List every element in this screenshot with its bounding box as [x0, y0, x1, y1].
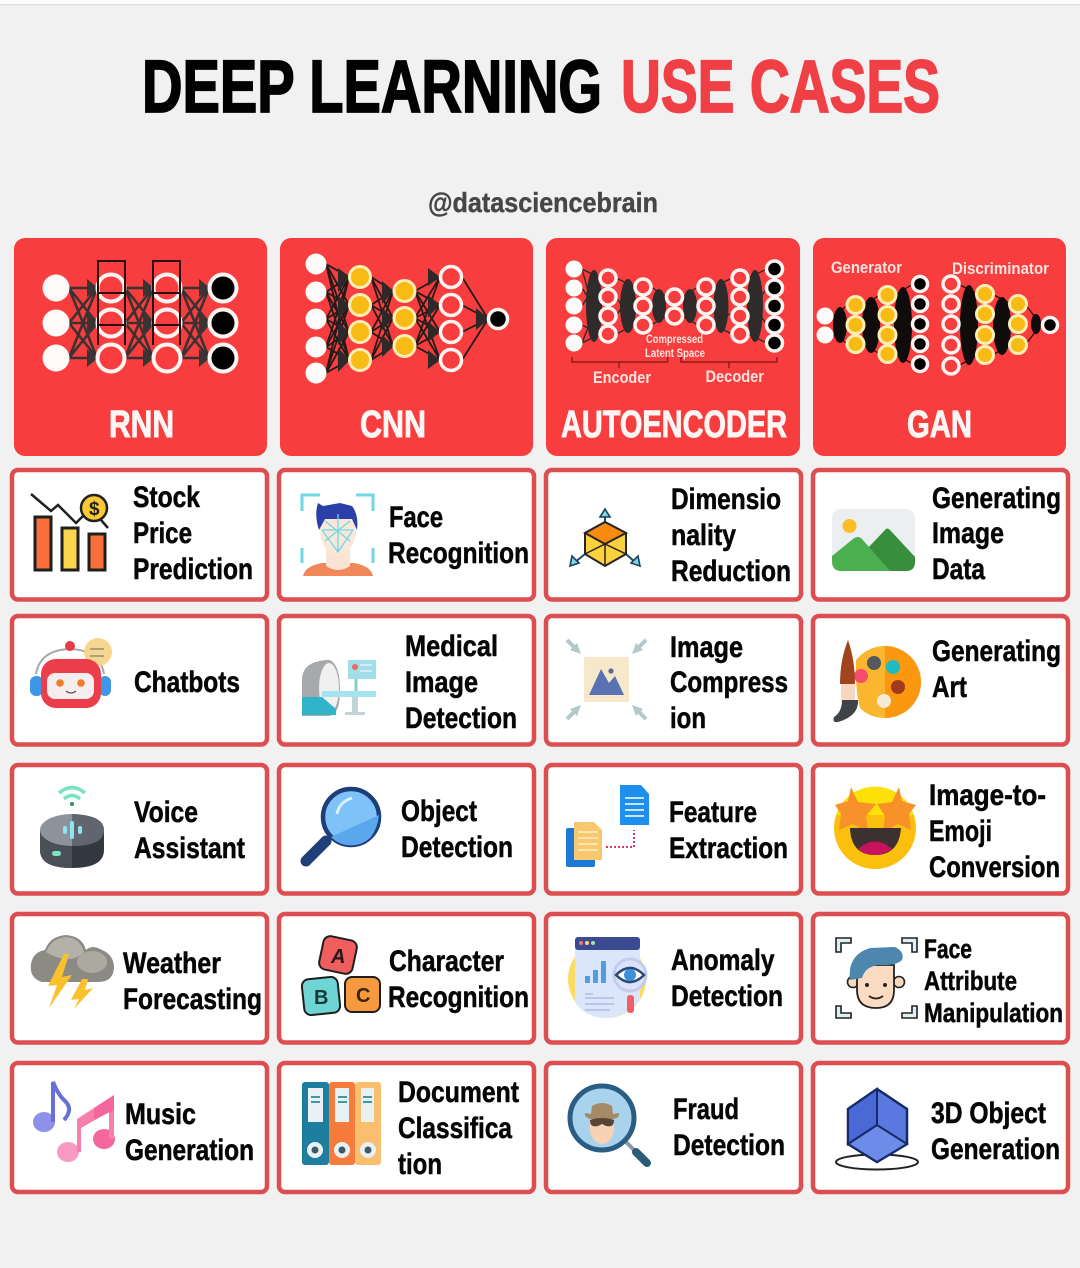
label [125, 1098, 254, 1167]
label: Detection [673, 1129, 785, 1162]
card: Feature Extraction [546, 765, 801, 894]
label: Weather [123, 947, 221, 980]
label [671, 483, 791, 588]
label [932, 635, 1061, 704]
label [405, 630, 517, 735]
label: Face [924, 934, 972, 964]
label: 3D Object [931, 1097, 1046, 1130]
label: Recognition [388, 537, 529, 570]
icon: stock chart: $ [89, 499, 100, 520]
label [388, 501, 529, 570]
card: Face Recognition [279, 470, 534, 600]
label: Prediction [133, 553, 253, 586]
title: USE CASES [621, 45, 940, 128]
card: Weather Forecasting [12, 914, 267, 1042]
label [929, 779, 1060, 884]
card: Image Compression [546, 616, 801, 744]
icon: music notes [33, 1082, 115, 1162]
icon: letter blocks: B [314, 987, 328, 1009]
panel: CNN [280, 238, 533, 456]
label: Stock [133, 481, 200, 514]
label: Emoji [929, 815, 992, 848]
label [671, 944, 783, 1013]
label: Music [125, 1098, 196, 1131]
card: 3D Object Generation [813, 1063, 1068, 1192]
icon: stock chart [31, 494, 108, 570]
label: Fraud [673, 1093, 739, 1126]
icon: face scan [302, 495, 373, 576]
panel: CNN: CNN [360, 404, 426, 446]
label: nality [671, 519, 736, 552]
card: Generating Art [813, 616, 1068, 744]
icon: documents [566, 785, 649, 867]
diagram: RNN network [42, 261, 236, 372]
label [670, 631, 788, 735]
card: Object Detection [279, 765, 534, 894]
card: Voice Assistant [12, 765, 267, 894]
label [398, 1076, 519, 1181]
label: Attribute [924, 966, 1017, 996]
label: Medical [405, 630, 498, 663]
label: Recognition [388, 981, 529, 1014]
label: Face [389, 501, 443, 534]
card: Music Generation [12, 1063, 267, 1192]
card: Medical Image Detection [279, 616, 534, 744]
label: Voice [134, 796, 198, 829]
label: Art [932, 671, 967, 704]
icon: anomaly inspection [568, 937, 646, 1018]
icon: palette and brush [834, 640, 921, 722]
card: Face Attribute Manipulation [813, 914, 1068, 1042]
label: Compress [670, 666, 788, 699]
label: ion [670, 702, 706, 735]
label: tion [398, 1148, 442, 1181]
card: Generating Image Data [813, 470, 1068, 600]
panel: Autoencoder: AUTOENCODER [561, 404, 787, 446]
diagram: autoencoder network: Decoder [706, 367, 764, 386]
label: Generation [125, 1134, 254, 1167]
card: Document Classification [279, 1063, 534, 1192]
label [123, 947, 262, 1016]
icon: landscape image [832, 509, 915, 571]
diagram: GAN network: Discriminator [952, 259, 1049, 278]
label [931, 1097, 1060, 1166]
label: Image [670, 631, 743, 664]
icon: letter blocks: C [356, 985, 370, 1007]
icon: letter blocks: A [330, 946, 345, 968]
icon: storm cloud [31, 935, 114, 1009]
label: Character [389, 945, 504, 978]
panel: GAN [813, 238, 1066, 456]
label [673, 1093, 785, 1162]
panel: RNN: RNN [109, 404, 174, 446]
label [669, 796, 788, 865]
icon: robot chatbot [30, 638, 112, 708]
label: Forecasting [123, 983, 262, 1016]
label [388, 945, 529, 1014]
label: Detection [405, 702, 517, 735]
card: Chatbots [12, 616, 267, 744]
panel: GAN: GAN [907, 404, 972, 446]
label: Image [405, 666, 478, 699]
icon: image compression [567, 640, 646, 719]
panel: Autoencoder [546, 238, 800, 456]
icon: magnifying glass [306, 789, 379, 861]
card: Image-to-Emoji Conversion [813, 765, 1068, 894]
title: DEEP LEARNING [142, 45, 602, 128]
label: Data [932, 553, 985, 586]
label [134, 796, 245, 865]
handle: @datasciencebrain [428, 187, 658, 218]
card: Stock Price Prediction [12, 470, 267, 600]
label: Reduction [671, 555, 791, 588]
card: Fraud Detection [546, 1063, 801, 1192]
label: Image-to- [929, 779, 1046, 812]
label: Anomaly [671, 944, 775, 977]
diagram: CNN network [306, 254, 508, 384]
label: Detection [401, 831, 513, 864]
label [924, 934, 1063, 1028]
label [401, 795, 513, 864]
icon: medical scanner [302, 660, 376, 716]
icon: letter blocks [301, 935, 380, 1016]
label [932, 482, 1061, 586]
label: Assistant [134, 832, 245, 865]
label: Chatbots [134, 666, 240, 699]
panel: RNN [14, 238, 267, 456]
diagram: autoencoder network [566, 260, 782, 387]
card: Character Recognition [279, 914, 534, 1042]
diagram: GAN network [816, 258, 1058, 374]
label [133, 481, 253, 586]
label: Classifica [398, 1112, 512, 1145]
card: Dimensionality Reduction [546, 470, 801, 600]
diagram: autoencoder network: Latent Space [645, 348, 705, 360]
diagram: autoencoder network: Compressed [646, 334, 703, 346]
diagram: GAN network: Generator [831, 258, 902, 277]
icon: detective magnifier [570, 1086, 647, 1163]
diagram: autoencoder network: Encoder [593, 368, 651, 387]
icon: face with frame corners [836, 938, 917, 1018]
label: Extraction [669, 832, 788, 865]
icon: binders [302, 1082, 381, 1165]
label: Detection [671, 980, 783, 1013]
card: Anomaly Detection [546, 914, 801, 1042]
label: Object [401, 795, 477, 828]
icon: smart speaker [40, 788, 104, 868]
label: Document [398, 1076, 519, 1109]
icon: 3D cube with axes [570, 509, 640, 566]
icon: 3D cube [836, 1089, 918, 1170]
label: Feature [669, 796, 757, 829]
label: Dimensio [671, 483, 781, 516]
icon: star-eyes emoji [834, 787, 916, 869]
label: Price [133, 517, 192, 550]
label: Image [932, 517, 1004, 550]
